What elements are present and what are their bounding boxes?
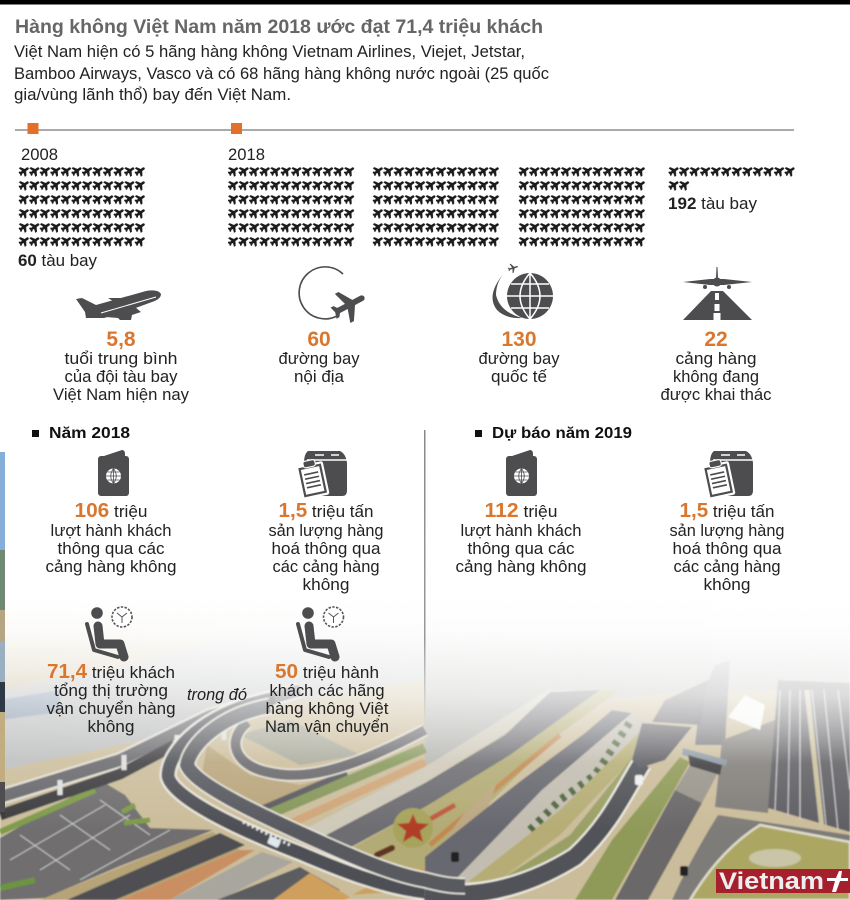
stat: domestic routes: 60: [307, 328, 331, 351]
top black bar: [0, 0, 850, 4]
stat: international routes: [478, 328, 560, 386]
stat: total passengers: vận chuyển hàng: [46, 700, 176, 718]
stat: cargo 2019: không: [704, 576, 750, 594]
title: Hàng không Việt Nam năm 2018 ước đạt 71,4 triệu khách: [15, 17, 543, 38]
stat: airports: được khai thác: [660, 386, 772, 404]
left photo strip: [0, 452, 5, 550]
fleet 2018: 2018: [228, 146, 265, 164]
inner loop: [235, 722, 425, 775]
stat: cargo 2019: 1,5 triệu tấn: [680, 500, 774, 522]
stat: passengers 2019: thông qua các: [468, 540, 574, 558]
stat: domestic routes: nội địa: [294, 368, 345, 386]
stat: cargo 2019: các cảng hàng: [674, 558, 780, 576]
icon: passport 2018: [98, 450, 129, 496]
stat: domestic routes: đường bay: [278, 350, 360, 368]
stat: passengers 2018: thông qua các: [58, 540, 164, 558]
flower: [393, 808, 433, 848]
timeline: [15, 123, 794, 134]
icon: passport 2019: [506, 450, 537, 496]
highway A: [297, 690, 575, 840]
stat: Vietnamese carriers passengers: [265, 661, 389, 736]
intro text: gia/vùng lãnh thổ) bay đến Việt Nam.: [14, 86, 291, 104]
fleet 2008: [18, 146, 145, 270]
icon: cargo 2019: [701, 451, 753, 500]
median: [343, 690, 620, 873]
stat: Vietnamese carriers passengers: Nam vận chuyển: [265, 718, 389, 736]
icon: runway with plane: [683, 267, 752, 320]
stat: Vietnamese carriers passengers: 50 triệu hành: [275, 661, 379, 683]
stat: aircraft age: [53, 328, 190, 404]
stat: total passengers: không: [88, 718, 134, 736]
fleet 2008: 60 tàu bay: [18, 252, 98, 270]
stat: cargo 2018: không: [302, 576, 350, 594]
icon: globe with plane: [492, 262, 553, 319]
stat: aircraft age: của đội tàu bay: [64, 368, 178, 386]
stat: international routes: quốc tế: [491, 368, 547, 386]
stat: total passengers: tổng thị trường: [54, 682, 168, 700]
stat: cargo 2018: các cảng hàng: [272, 558, 380, 576]
stat: aircraft age: tuổi trung bình: [64, 350, 178, 368]
stat: airports: cảng hàng: [676, 350, 756, 368]
stat: Vietnamese carriers passengers: khách các hãng: [270, 682, 384, 700]
icon: seated passenger with clock: [87, 607, 132, 657]
white haze overlay: [5, 600, 850, 830]
stat: cargo 2019: [670, 500, 784, 594]
icon: cargo 2018: [295, 451, 347, 500]
stat: total passengers: 71,4 triệu khách: [47, 661, 175, 683]
stat: passengers 2018: cảng hàng không: [46, 558, 176, 576]
stat: international routes: 130: [501, 328, 537, 351]
apron: [768, 680, 850, 832]
stat: aircraft age: Việt Nam hiện nay: [53, 386, 190, 404]
heading: forecast 2019: Dự báo năm 2019: [492, 425, 632, 442]
logo: Vietnam+: [716, 868, 850, 895]
ramp: [168, 698, 425, 892]
stat: cargo 2018: sản lượng hàng: [268, 522, 384, 540]
stat: passengers 2018: [46, 500, 176, 576]
field inside ramp: [200, 745, 340, 815]
parking lot: [0, 780, 213, 900]
stat: passengers 2019: 112 triệu: [484, 500, 558, 522]
road band under inner loop: [260, 773, 347, 810]
icon: domestic route: [299, 267, 372, 327]
divider: [424, 430, 426, 730]
stat: airports: không đang: [673, 368, 759, 386]
fleet 2018: 192 tàu bay: [668, 195, 758, 213]
toll road: [615, 790, 702, 900]
icon: airliner: [76, 290, 161, 320]
tan and green strip: [468, 722, 650, 882]
intro text: Bamboo Airways, Vasco và có 68 hãng hàng không nước ngoài (25 quốc: [14, 65, 549, 83]
stat: passengers 2019: [456, 500, 586, 576]
stat: cargo 2018: [268, 500, 384, 594]
stat: passengers 2018: lượt hành khách: [50, 522, 172, 540]
green median: [575, 757, 690, 900]
stat: passengers 2018: 106 triệu: [74, 500, 148, 522]
stat: total passengers: [46, 661, 176, 736]
strips below the ramp: [40, 832, 240, 900]
stat: cargo 2019: hoá thông qua: [672, 540, 782, 558]
stat: Vietnamese carriers passengers: hàng không Việt: [266, 700, 389, 718]
label: of which: trong đó: [187, 686, 247, 704]
icon: seated passenger with clock: [298, 607, 344, 657]
stat: cargo 2018: hoá thông qua: [272, 540, 381, 558]
stat: passengers 2019: cảng hàng không: [456, 558, 586, 576]
background photo: airport highway: [0, 452, 850, 900]
heading: 2018: Năm 2018: [49, 425, 130, 442]
fleet 2008: 2008: [21, 146, 58, 164]
stat: airports: [660, 328, 772, 404]
stat: domestic routes: [278, 328, 360, 386]
stat: airports: 22: [704, 328, 728, 351]
elevated road: [0, 690, 300, 797]
pale road with trees: [458, 713, 650, 882]
ramp road to toll: [425, 763, 642, 894]
highway B: [425, 710, 632, 880]
intro text: [14, 43, 549, 104]
stat: aircraft age: 5,8: [106, 328, 136, 351]
stat: cargo 2018: 1,5 triệu tấn: [278, 500, 374, 522]
intro text: Việt Nam hiện có 5 hãng hàng không Vietnam Airlines, Viejet, Jetstar,: [14, 43, 525, 61]
logo: Vietnam+: Vietnam: [719, 868, 824, 895]
stat: international routes: đường bay: [478, 350, 560, 368]
stat: passengers 2019: lượt hành khách: [460, 522, 582, 540]
fleet 2018: [228, 146, 795, 248]
stat: cargo 2019: sản lượng hàng: [670, 522, 784, 540]
field: [690, 825, 850, 900]
